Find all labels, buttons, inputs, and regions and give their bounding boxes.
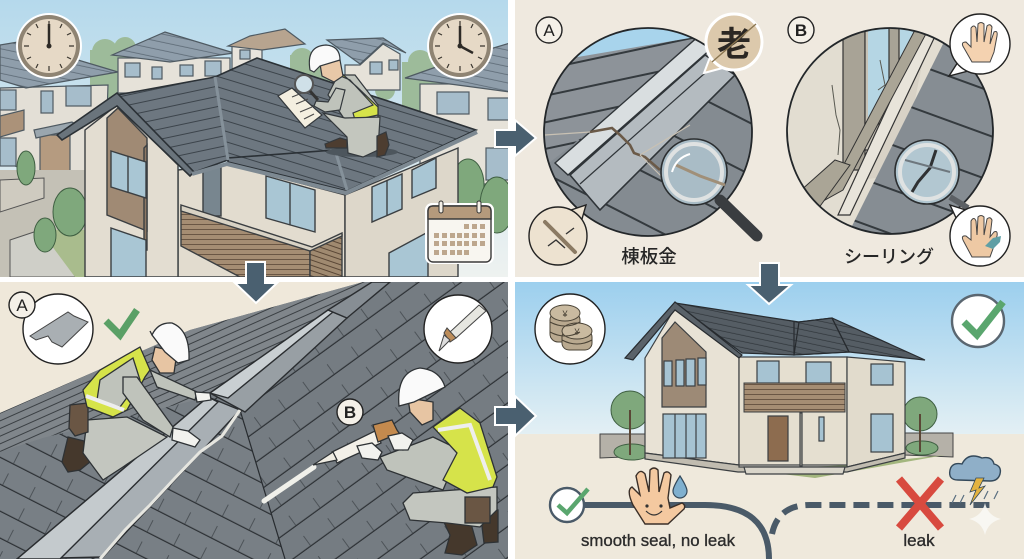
panel: afternoon roof inspection xyxy=(0,0,514,277)
label: sealing: シーリング xyxy=(844,247,934,267)
callout: aged kanji xyxy=(704,14,762,73)
ridge metal installed xyxy=(17,282,390,559)
balcony xyxy=(744,383,845,412)
icon: large check badge xyxy=(952,295,1004,347)
icon: calendar xyxy=(425,201,494,264)
callout: brittle crack icon xyxy=(529,205,587,265)
icon: green check xyxy=(106,310,137,335)
callout: smooth hand xyxy=(949,14,1010,76)
garden trees xyxy=(17,151,514,252)
icon: clock twelve o'clock xyxy=(16,13,82,79)
sparkle mark xyxy=(969,503,1001,535)
callout: aged kanji: 老 xyxy=(717,26,751,64)
badge: B: B xyxy=(795,21,807,40)
arrow: step 2 to step 4 xyxy=(748,263,791,304)
main roof xyxy=(57,58,477,193)
background house tan roof xyxy=(228,29,305,72)
background house far right xyxy=(405,43,510,184)
main house windows xyxy=(111,151,436,277)
arrow: step 3 to step 4 xyxy=(495,396,536,436)
inset: ridge metal part xyxy=(23,294,93,364)
background house centre xyxy=(112,32,234,93)
inspector worker xyxy=(278,45,398,157)
inset: caulk nozzle xyxy=(424,295,492,363)
panel: result, repaired house xyxy=(515,282,1024,559)
arrow: step 1 to step 3 xyxy=(235,262,277,303)
badge: B xyxy=(337,399,363,425)
house windows and door xyxy=(663,358,893,466)
badge: A: A xyxy=(16,296,28,315)
panel: repair work on roof xyxy=(0,282,508,559)
worker B applying sealant xyxy=(313,368,498,555)
arrow: step 1 to step 2 xyxy=(495,120,536,156)
label: leak: leak xyxy=(903,531,935,550)
label: ridge metal: 棟板金 xyxy=(621,246,677,267)
icon: storm cloud xyxy=(950,456,1000,505)
flow path: no leak xyxy=(550,468,769,559)
badge: A: A xyxy=(543,21,555,40)
roof lower valley slope xyxy=(116,412,284,559)
sealant bead xyxy=(264,467,314,501)
main house walls xyxy=(85,105,458,277)
background house right of centre xyxy=(327,38,406,90)
icon: yen coin stacks: ¥ xyxy=(561,309,568,319)
icon: red cross xyxy=(899,479,941,528)
badge: A xyxy=(9,292,35,318)
house walls xyxy=(645,308,905,474)
badge: B: B xyxy=(344,403,356,422)
label: smooth seal: smooth seal, no leak xyxy=(581,531,735,550)
panel: damage close-ups xyxy=(515,0,1024,277)
house roof xyxy=(625,302,925,360)
magnified circle B: sealing xyxy=(786,27,994,235)
roof upper left slope xyxy=(0,282,372,452)
background trees xyxy=(90,37,441,110)
fence and trees xyxy=(600,391,953,478)
balcony xyxy=(181,205,342,277)
roof lower left slope xyxy=(0,404,184,559)
icon: small check badge xyxy=(550,488,588,522)
magnifier A xyxy=(661,139,757,236)
magnified circle A: ridge metal xyxy=(540,20,760,240)
badge: A xyxy=(536,17,562,43)
icon: clock four o'clock xyxy=(427,13,493,79)
icon: yen coin stacks: ¥ xyxy=(573,327,580,337)
magnifier B xyxy=(895,140,968,208)
flow path: leak dashed xyxy=(772,505,990,534)
icon: water drop xyxy=(673,476,687,498)
lawn and fence xyxy=(0,170,90,277)
callout: cracked hand xyxy=(950,205,1010,266)
badge: B xyxy=(788,17,814,43)
icon: smiling hand xyxy=(629,468,685,524)
beige background area xyxy=(0,282,363,413)
icon: yen coin stacks xyxy=(535,294,605,364)
worker A fitting ridge metal xyxy=(62,323,211,480)
background house left xyxy=(0,42,118,176)
